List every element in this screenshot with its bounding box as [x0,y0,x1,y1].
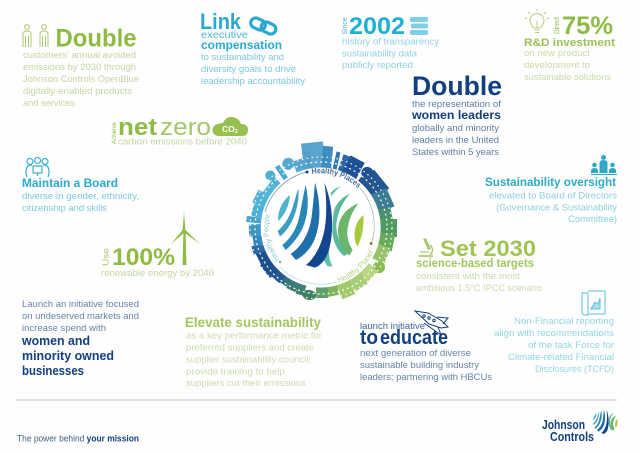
body text: supplier sustainability council; [186,354,311,366]
body text: preferred suppliers and create [186,342,314,354]
body text: Climate-related Financial [508,352,614,363]
panel: set 2030: ambitious 1.5°C IPCC scenario [416,283,542,294]
panel: direct 75% R&D: on new product [524,48,590,59]
panel: non-financial reporting [494,291,614,375]
ring labels [264,168,374,282]
body text: carbon emissions before 2040 [118,137,247,148]
panel: link executive compensation [200,9,305,87]
emphasis text: minority owned [22,348,114,363]
wordmark: Johnson [542,417,585,432]
panel: set 2030: consistent with the most [416,271,520,282]
body text: emissions by 2030 through [23,62,136,73]
heading: to [360,327,378,349]
ring labels: Healthy People [264,214,280,262]
body text: citizenship and skills [22,203,107,214]
icon: board people [591,155,617,175]
body text: and services [23,98,75,109]
heading: Set 2030 [440,236,536,261]
body text: of the task Force for [528,340,614,351]
rotated label: Use [102,247,110,266]
central emblem: city ring and swirl [246,141,397,300]
icon: report document [582,291,605,315]
body text [360,348,492,383]
heading: 100% [112,244,175,271]
panel: double customers' avoided emissions [23,25,139,109]
body text: next generation of diverse [360,348,471,359]
heading: Elevate sustainability [185,314,321,330]
heading: educate [380,327,448,349]
body text: Launch an initiative focused [22,299,139,310]
icon: wind turbine [171,212,200,265]
icon: light bulb [525,9,549,32]
body text [342,36,439,71]
panel: maintain a board [22,158,139,214]
ring arcs [265,170,374,284]
panel: link executive compensation: to sustainability and [201,52,284,63]
body text: Johnson Controls OpenBlue [23,74,139,85]
body text: align with recommendations [494,328,614,339]
icon: chain [249,16,277,36]
heading: 75% [562,12,613,40]
body text: executive [201,30,248,41]
panel: net zero: zero [160,114,211,141]
panel: launch initiative to educate [360,311,492,383]
body text: digitally-enabled products [23,86,132,97]
heading: Double [412,71,502,101]
body text: the representation of [412,99,501,110]
logo mark [593,410,618,434]
body text: leaders in the United [412,135,499,146]
body text: leaders; partnering with HBCUs [360,372,492,383]
body text [186,330,322,389]
wordmark: Controls [550,429,594,444]
footer tagline: The power behind your mission [17,434,139,444]
body text [411,99,501,158]
ring labels: Healthy Places [312,168,360,188]
icon: CO2 cloud: CO [222,124,235,134]
body text [494,316,614,375]
lead text: launch initiative [360,321,425,332]
Johnson Controls logo [542,410,618,444]
panel: set 2030 [416,236,542,294]
rotated label: Direct [552,16,561,34]
wordmark [542,417,594,444]
body text: as a key performance metric for [186,330,322,342]
icon: microscope [419,238,433,256]
body text [22,191,139,214]
body text: renewable energy by 2040 [101,268,214,279]
body text [23,50,139,109]
inner white disc [261,168,381,288]
body text: history of transparency [342,36,439,48]
icon: board members [26,158,49,177]
icon: rocket [415,311,448,335]
heading: 2002 [349,13,405,40]
body text: sustainability data [342,48,418,60]
panel: since 2002 [340,13,439,71]
panel: direct 75% R&D [524,9,615,83]
ring labels: Healthy Planet [337,250,374,282]
panel: sustainability oversight [485,155,617,225]
body text [22,299,139,334]
city ring [246,141,397,301]
body text: elevated to Board of Directors [489,190,617,202]
heading: net [118,114,157,141]
panel: use 100% renewable [101,212,214,279]
body text: globally and minority [412,123,499,134]
panel: net zero [111,114,248,148]
body text: science-based targets [416,258,534,270]
panel: link executive compensation: compensation [201,38,282,52]
emphasis text: businesses [22,363,84,378]
body text: customers' annual avoided [23,50,136,61]
panel: link executive compensation: diversity goals to drive [201,64,296,75]
heading: Maintain a Board [22,176,118,190]
heading: Double [56,25,137,53]
body text: diverse in gender, ethnicity, [22,191,139,202]
body text: Committee) [568,214,617,225]
body text: (Governance & Sustainability [496,202,617,214]
rotated label: Achieve [111,122,118,144]
body text: Non-Financial reporting [514,316,614,327]
body text: provide training to help [186,366,285,378]
icon: CO2 cloud: 2 [235,129,238,135]
emphasis text: women and [21,333,90,348]
heading: Link [200,9,242,34]
panel: women and minority owned businesses [21,299,139,378]
icon: CO2 cloud [212,117,248,136]
rotated label: Since [340,18,349,34]
panel: direct 75% R&D: development to [524,60,590,71]
divider rule [16,400,617,401]
body text [489,190,617,225]
icon: two people [23,25,48,47]
body text: increase spend with [22,323,106,334]
body text: suppliers cut their emissions [186,378,306,389]
panel: elevate sustainability [185,314,322,389]
panel: link executive compensation: leadership accountability [201,76,305,87]
body text: women leaders [411,108,501,122]
emphasis text [21,333,114,378]
heading: Sustainability oversight [485,175,616,189]
body text: sustainable building industry [360,360,479,371]
panel: direct 75% R&D: sustainable solutions [524,72,611,83]
body text: publicly reported [342,60,413,71]
body text: States within 5 years [412,147,499,158]
body text: Disclosures (TCFD) [535,364,614,375]
swirl logo [278,183,364,268]
body text: on undeserved markets and [22,311,139,322]
icon: stack [410,17,428,35]
panel: double women leaders [411,71,502,158]
body text: R&D investment [524,37,615,49]
